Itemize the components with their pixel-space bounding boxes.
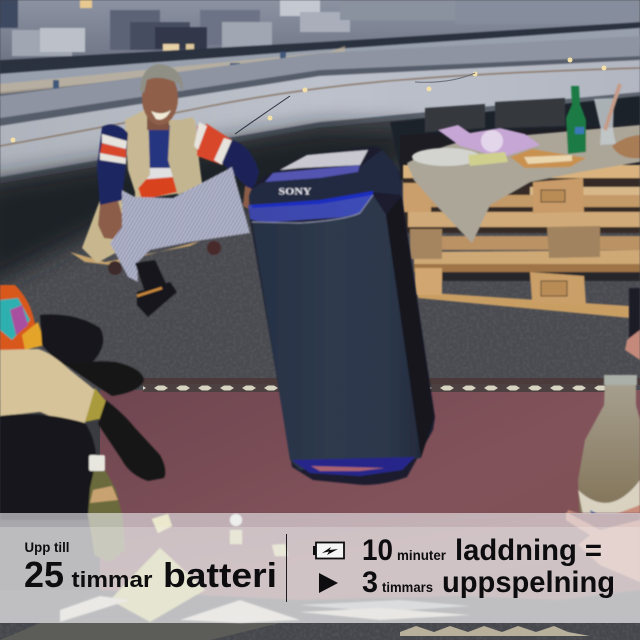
pallet table	[403, 84, 640, 318]
black trousers	[0, 414, 97, 520]
icon: play triangle	[319, 573, 338, 593]
text: 10 minuter laddning =: laddning =	[455, 534, 602, 567]
grille	[252, 195, 421, 470]
glass bottle	[578, 375, 640, 525]
yellow sock	[85, 388, 109, 422]
translucent info panel	[0, 513, 640, 623]
text: 3 timmars uppspelning: uppspelning	[442, 566, 615, 599]
head	[142, 71, 178, 125]
text: 3 timmars uppspelning	[362, 566, 615, 599]
collar	[249, 150, 402, 205]
person sitting on skateboard	[70, 64, 259, 317]
vest panels	[125, 108, 150, 192]
divider	[286, 534, 287, 602]
icon: battery charging	[313, 542, 344, 558]
napkin and wrapper	[438, 125, 540, 158]
rooftop ledge	[0, 36, 640, 184]
phone in hand	[629, 288, 640, 348]
hands	[98, 201, 125, 240]
skateboard	[70, 241, 200, 265]
dark jacket	[40, 315, 103, 368]
hand seen through panel	[566, 512, 640, 582]
big text: 25 timmar batteri	[24, 554, 277, 595]
text: upp till: Upp till	[24, 540, 70, 555]
bottle left	[88, 456, 125, 562]
right arm sleeve	[197, 124, 232, 165]
top boot	[66, 361, 144, 396]
bottle seen through panel	[90, 513, 125, 562]
torso	[135, 120, 202, 200]
ground	[0, 98, 640, 400]
tablecloth	[407, 125, 640, 243]
text: 3 timmars uppspelning: timmars	[382, 580, 433, 595]
lower boot	[98, 400, 165, 481]
striped pants	[110, 167, 250, 282]
text: 10 minuter laddning =: 10	[362, 534, 393, 567]
ground strip below panel	[0, 590, 640, 640]
big text: 25 timmar batteri: timmar	[72, 567, 153, 592]
logo: SONY	[278, 188, 312, 198]
top lid	[280, 150, 368, 170]
hand	[566, 505, 640, 582]
blue light band	[248, 192, 373, 222]
snack bag	[510, 149, 586, 168]
bottom light	[292, 457, 415, 476]
sock and shoe	[135, 260, 168, 292]
rug with pattern	[100, 378, 640, 640]
plate	[412, 148, 480, 166]
coat	[82, 200, 140, 263]
text: 10 minuter laddning =: minuter	[397, 548, 447, 563]
friend in foreground left	[0, 285, 165, 562]
left column: battery claim	[24, 540, 277, 595]
big text: 25 timmar batteri: 25	[24, 554, 64, 595]
big text: 25 timmar batteri: batteri	[163, 557, 277, 595]
string light bulbs	[10, 58, 606, 142]
neck	[147, 112, 169, 130]
text: 3 timmars uppspelning: 3	[362, 566, 378, 599]
side panel	[386, 197, 434, 458]
colorful shirt	[0, 285, 42, 355]
cork coaster	[612, 135, 640, 158]
string lights	[0, 68, 640, 146]
right column: quick charge	[313, 534, 615, 599]
text: 10 minuter laddning =	[362, 534, 602, 567]
beige trousers	[0, 349, 95, 423]
pallet blocks	[403, 183, 431, 212]
glass with straw	[594, 98, 616, 145]
speaker	[248, 147, 435, 485]
wall under table	[390, 96, 640, 180]
left arm sleeve	[97, 125, 128, 207]
bottle and hand right	[566, 288, 640, 582]
background: city skyline	[0, 0, 640, 100]
speaker body	[249, 147, 435, 485]
green bottle	[566, 86, 586, 154]
things seen through the panel	[60, 512, 640, 623]
